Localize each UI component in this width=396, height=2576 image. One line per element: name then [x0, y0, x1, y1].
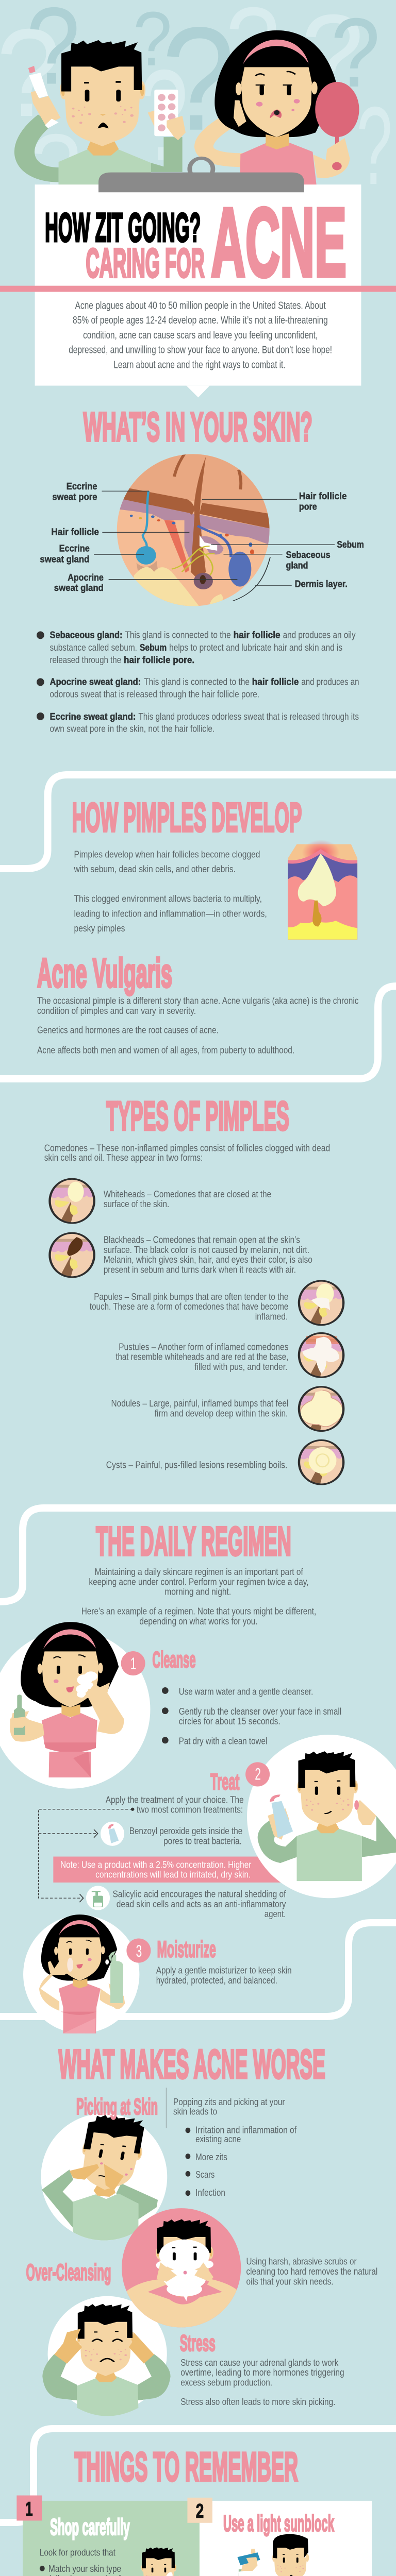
intro text — [69, 300, 332, 371]
section: the daily regimen: Cleanse — [152, 1647, 196, 1672]
text: comedones: skin cells and oil. These appear in two forms: — [44, 1153, 203, 1163]
diagram labels: Hair follicle — [299, 490, 346, 501]
diagram labels: sweat pore — [52, 492, 97, 502]
diagram labels: sweat gland — [54, 582, 104, 593]
number tag 2: 2 — [196, 2499, 204, 2522]
text: treat intro: two most common treatments: — [137, 1804, 243, 1815]
diagram labels: Apocrine — [68, 572, 104, 583]
bullet: apocrine sweat gland: This gland is connected to the — [144, 676, 250, 687]
section: treat and moisturize — [23, 1735, 396, 2033]
bullet: apocrine sweat gland: hair follicle — [252, 676, 299, 687]
section: treat and moisturize: Treat — [210, 1769, 239, 1795]
text: nodules — [111, 1398, 288, 1418]
text: over-cleansing: oils that your skin needs. — [246, 2276, 334, 2286]
bullet: apocrine sweat gland: Apocrine sweat gland: — [50, 676, 141, 687]
question marks backdrop: ? — [139, 43, 188, 188]
diagram labels — [40, 481, 364, 593]
dashed arrows to treatments — [39, 1808, 134, 1902]
icon: tube in circle — [101, 1822, 124, 1846]
step 3 badge — [126, 1938, 151, 1963]
text: how pimples develop: with sebum, dead skin cells, and other debris. — [74, 864, 236, 874]
section: types of pimples list — [50, 1178, 344, 1485]
bullet: eccrine sweat gland — [37, 711, 359, 734]
text: over-cleansing — [246, 2256, 377, 2286]
diagram labels: Sebum — [337, 539, 364, 550]
bullet: sebaceous gland: released through the — [50, 654, 121, 665]
card 1: shop carefully: Match your skin type — [48, 2563, 121, 2574]
text: regimen intro — [81, 1566, 316, 1626]
text: treat intro: Apply the treatment of your choice. The — [106, 1794, 244, 1805]
section: how pimples develop body: Acne Vulgaris — [37, 951, 172, 995]
text: salicylic acid: Salicylic acid encourages the natural shedding of — [112, 1889, 286, 1900]
card 1: shop carefully: Shop carefully — [50, 2515, 130, 2540]
text: picking at skin: Irritation and inflammation of — [195, 2125, 297, 2136]
bullet: eccrine sweat gland: Eccrine sweat gland: — [50, 711, 136, 722]
section: how pimples develop body — [37, 840, 359, 1163]
question marks backdrop — [0, 0, 392, 224]
character: man with tube and pills — [24, 40, 186, 185]
skin cross-section diagram — [40, 453, 364, 607]
diagram labels: Dermis layer. — [295, 579, 348, 589]
text: benzoyl peroxide: Benzoyl peroxide gets inside the — [129, 1825, 242, 1836]
list: cleanse steps: Pat dry with a clean towel — [179, 1736, 267, 1747]
section: what makes acne worse: Picking at Skin — [76, 2094, 158, 2120]
character: woman cleansing — [0, 1622, 150, 1789]
text: how pimples develop: leading to infection and inflammation—in other words, — [74, 908, 267, 919]
character: man with sunblock — [237, 2534, 321, 2576]
diagram labels: sweat gland — [40, 554, 89, 565]
bullet: sebaceous gland — [37, 630, 356, 665]
question marks backdrop: ? — [357, 84, 392, 208]
text: picking at skin: existing acne — [195, 2134, 241, 2144]
section: treat and moisturize: Moisturize — [157, 1937, 216, 1962]
step 3 badge: 3 — [136, 1942, 142, 1960]
bullet: sebaceous gland: hair follicle — [234, 630, 280, 640]
character: man applying treatment — [247, 1735, 396, 1898]
text: stress — [180, 2357, 344, 2407]
text: how pimples develop: This clogged environment allows bacteria to multiply, — [74, 893, 262, 904]
text: benzoyl peroxide — [129, 1825, 242, 1846]
white winding section dividers — [0, 775, 396, 2522]
divider — [166, 2088, 167, 2128]
text: pustules — [116, 1342, 288, 1372]
text: regimen intro: depending on what works for you. — [139, 1616, 258, 1626]
text: how pimples develop: pesky pimples — [74, 923, 125, 934]
text: whiteheads: Whiteheads – Comedones that are closed at the — [104, 1189, 271, 1199]
text: salicylic acid — [112, 1889, 286, 1919]
question marks backdrop: ? — [30, 114, 81, 224]
icon: clipboard clip — [98, 158, 304, 192]
character: stressed man — [42, 2296, 171, 2416]
text: comedones — [44, 1143, 330, 1163]
number tag 1: 1 — [25, 2497, 33, 2520]
panel: white clipboard — [35, 184, 361, 386]
text: regimen intro: morning and night. — [164, 1586, 231, 1597]
icon: cyst — [299, 1440, 344, 1485]
step 1 badge: 1 — [130, 1654, 136, 1673]
icon: blackhead — [50, 1232, 95, 1278]
question marks backdrop: ? — [331, 0, 380, 108]
text: acne vulgaris: Genetics and hormones are the root causes of acne. — [37, 1025, 219, 1036]
note banner: concentrations will lead to irritated, dry skin. — [95, 1869, 251, 1880]
card 1: shop carefully: Look for products that — [40, 2547, 116, 2558]
text: picking at skin: Infection — [195, 2187, 225, 2198]
question marks backdrop: ? — [161, 0, 235, 161]
text: nodules: Nodules – Large, painful, inflamed bumps that feel — [111, 1398, 288, 1409]
diagram labels: Sebaceous — [286, 550, 331, 560]
skin component descriptions — [37, 630, 359, 840]
text: picking at skin — [173, 2096, 297, 2198]
note banner — [53, 1857, 286, 1883]
bullet: sebaceous gland: Sebaceous gland: — [50, 630, 123, 640]
title — [45, 188, 346, 297]
text: moisturize: Apply a gentle moisturizer to keep skin — [156, 1965, 292, 1976]
pink band — [0, 286, 396, 292]
text: how pimples develop: Pimples develop when hair follicles become clogged — [74, 849, 260, 860]
text: acne vulgaris — [37, 995, 359, 1055]
icon: pump bottle in circle — [86, 1886, 110, 1910]
text: treat intro — [106, 1794, 244, 1815]
text: cysts: Cysts – Painful, pus-filled lesions resembling boils. — [106, 1460, 287, 1470]
text: pustules: filled with pus, and tender. — [194, 1361, 287, 1372]
bullet: eccrine sweat gland: own sweat pore in the skin, not the hair follicle. — [50, 723, 214, 734]
icon: pustule — [299, 1333, 344, 1378]
bullet: apocrine sweat gland — [37, 676, 359, 700]
number tag 1 — [16, 2496, 42, 2521]
character: woman moisturizing — [23, 1914, 139, 2033]
number tag 2 — [187, 2498, 212, 2523]
text: papules — [90, 1291, 288, 1322]
text: whiteheads: surface of the skin. — [104, 1199, 169, 1209]
bullet: sebaceous gland: Sebum — [140, 642, 167, 653]
bullet: sebaceous gland: hair follicle pore. — [124, 654, 194, 665]
text: whiteheads — [104, 1189, 271, 1209]
card 2: use a light sunblock — [200, 2501, 372, 2576]
icon: papule — [299, 1280, 344, 1325]
text: picking at skin: skin leads to — [173, 2106, 217, 2117]
section: things to remember cards — [16, 2496, 372, 2576]
bullet: sebaceous gland: This gland is connected to the — [125, 630, 231, 640]
character: man over-cleansing — [121, 2208, 242, 2329]
text: how pimples develop — [74, 849, 267, 934]
text: nodules: firm and develop deep within the skin. — [155, 1408, 288, 1418]
diagram labels: Eccrine — [59, 543, 90, 554]
text: picking at skin: Popping zits and picking at your — [173, 2096, 285, 2107]
diagram labels: Eccrine — [67, 481, 97, 492]
section: what's in your skin — [40, 404, 364, 607]
section: what makes acne worse: Over-Cleansing — [26, 2260, 111, 2285]
icon: whitehead — [50, 1178, 95, 1224]
text: salicylic acid: dead skin cells and acts as an anti-inflammatory — [117, 1899, 286, 1909]
section: what makes acne worse — [26, 2042, 377, 2489]
text: moisturize: hydrated, protected, and balanced. — [156, 1975, 277, 1986]
text: picking at skin: More zits — [195, 2151, 227, 2162]
diagram labels: pore — [299, 501, 317, 512]
text: pustules: Pustules – Another form of inflamed comedones — [119, 1342, 288, 1352]
diagram labels: Hair follicle — [51, 527, 99, 537]
character: man with cleanser — [135, 2547, 195, 2576]
step 2 badge: 2 — [255, 1765, 261, 1784]
step 2 badge — [245, 1762, 270, 1786]
character: man picking at skin — [41, 2113, 167, 2242]
pimple cross-section illustration — [288, 840, 357, 940]
callout pointer — [186, 386, 210, 397]
text: stress: excess sebum production. — [180, 2377, 272, 2388]
character: woman with mirror — [204, 30, 359, 185]
leader lines — [94, 491, 335, 601]
list: cleanse steps: circles for about 15 seconds. — [179, 1716, 280, 1726]
section: what makes acne worse: Stress — [180, 2331, 216, 2356]
card 1: shop carefully — [23, 2501, 200, 2576]
note banner: Note: Use a product with a 2.5% concentration. Higher — [60, 1859, 252, 1870]
text: papules: inflamed. — [255, 1311, 288, 1322]
text: moisturize — [156, 1965, 292, 1986]
step 1 badge — [121, 1651, 145, 1675]
panel: hero illustration and title — [0, 0, 396, 397]
text: blackheads — [104, 1234, 312, 1275]
icon: nodule — [299, 1386, 344, 1431]
section: the daily regimen — [0, 1460, 341, 1789]
bullet: sebaceous gland: substance called sebum. — [50, 642, 137, 653]
text: salicylic acid: agent. — [265, 1908, 286, 1919]
list: cleanse steps — [162, 1686, 341, 1747]
bullet: apocrine sweat gland: odorous sweat that is released through the hair follicle pore. — [50, 689, 259, 700]
text: acne vulgaris: condition of pimples and can vary in severity. — [37, 1005, 196, 1016]
diagram labels: gland — [286, 560, 308, 571]
text: benzoyl peroxide: pores to treat bacteria. — [163, 1836, 242, 1846]
text: picking at skin: Scars — [195, 2169, 214, 2180]
